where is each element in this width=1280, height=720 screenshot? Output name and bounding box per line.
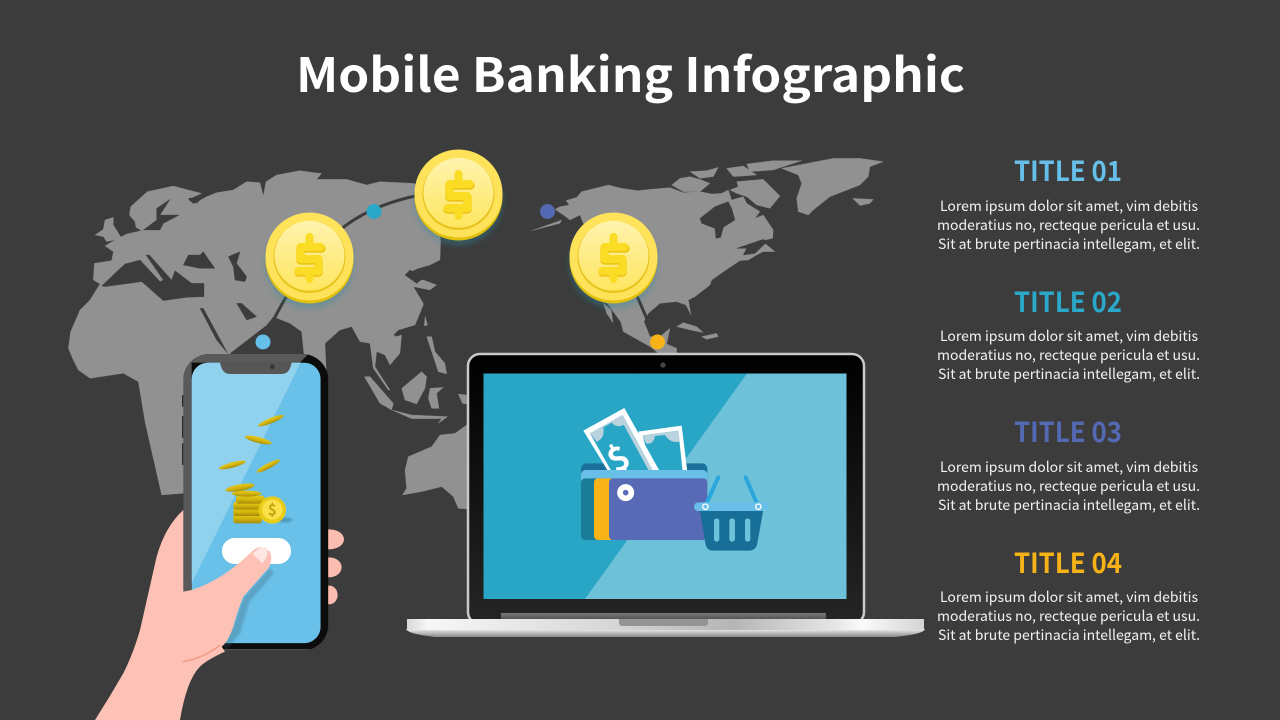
on-screen button — [222, 538, 291, 564]
coin stack — [225, 482, 292, 524]
laptop base — [407, 619, 924, 630]
body 03 — [937, 457, 1200, 515]
map: Great Britain — [95, 217, 122, 242]
screen light panel — [585, 374, 846, 599]
wallet flap — [581, 470, 707, 487]
icon: dollar coin left — [266, 212, 354, 308]
map: North America and Greenland — [532, 158, 883, 360]
laptop screen — [484, 374, 846, 599]
basket rim — [694, 502, 769, 511]
body 02: Sit at brute pertinacia intellegam, et elit. — [938, 364, 1200, 384]
thumb shadow — [222, 568, 274, 648]
basket rings — [703, 504, 761, 509]
hand and thumb — [95, 510, 271, 720]
body 04: Lorem ipsum dolor sit amet, vim debitis — [940, 587, 1198, 607]
heading 04: TITLE 04 — [1014, 542, 1122, 582]
fingers behind the phone — [315, 529, 344, 604]
thumbnail — [253, 547, 268, 563]
heading 03: TITLE 03 — [1014, 411, 1122, 451]
basket body — [700, 510, 763, 551]
phone camera — [270, 364, 275, 369]
phone notch — [220, 362, 292, 374]
body 03: moderatius no, recteque pericula et usu. — [937, 476, 1200, 496]
body 04: moderatius no, recteque pericula et usu. — [937, 606, 1200, 626]
basket slots — [714, 518, 750, 542]
text block 03 — [937, 411, 1200, 515]
map: inland seas — [102, 197, 423, 353]
laptop thumb notch — [619, 619, 708, 626]
route lines — [263, 195, 657, 342]
map: Eurasia and Africa — [68, 171, 441, 495]
phone held in hand — [95, 354, 344, 720]
banknote front: $ — [596, 430, 638, 483]
card teal — [581, 478, 614, 540]
body 01: Lorem ipsum dolor sit amet, vim debitis — [940, 196, 1198, 216]
route dot 02 — [366, 204, 382, 219]
icon: dollar coin right — [570, 212, 658, 308]
laptop camera — [660, 362, 666, 368]
falling coins — [218, 413, 285, 474]
laptop lid — [468, 354, 864, 624]
icon: dollar coin top — [414, 150, 502, 245]
laptop hinge — [501, 613, 826, 619]
heading 01: TITLE 01 — [1014, 150, 1122, 190]
text block 04 — [937, 542, 1200, 645]
world map — [68, 158, 883, 510]
coin stack: $ — [268, 498, 277, 520]
body 03: Sit at brute pertinacia intellegam, et elit. — [938, 495, 1200, 515]
laptop base lip — [406, 629, 925, 637]
body 01: moderatius no, recteque pericula et usu. — [937, 215, 1200, 235]
card yellow — [594, 478, 617, 540]
wallet snap — [620, 487, 631, 498]
wallet and basket illustration — [581, 408, 769, 551]
hand crease — [183, 645, 220, 662]
phone screen — [192, 363, 321, 643]
title: Mobile Banking Infographic — [296, 37, 965, 106]
route dot 01 — [256, 334, 270, 350]
body 02: moderatius no, recteque pericula et usu. — [937, 345, 1200, 365]
body 04 — [937, 587, 1200, 645]
body 04: Sit at brute pertinacia intellegam, et elit. — [938, 625, 1200, 645]
route dot 04 — [650, 334, 665, 350]
route dot 03 — [540, 204, 555, 219]
body 02 — [937, 326, 1200, 384]
map: South East Asia and Australia — [364, 317, 478, 510]
phone side buttons — [182, 395, 183, 465]
wallet back — [581, 463, 707, 490]
text block 01 — [937, 150, 1200, 254]
banknote rear — [638, 426, 687, 472]
body 01: Sit at brute pertinacia intellegam, et elit. — [938, 234, 1200, 254]
body 01 — [937, 196, 1200, 254]
body 03: Lorem ipsum dolor sit amet, vim debitis — [940, 457, 1198, 477]
banknote front — [583, 408, 660, 483]
phone body — [183, 354, 328, 651]
body 02: Lorem ipsum dolor sit amet, vim debitis — [940, 326, 1198, 346]
text block 02 — [937, 281, 1200, 384]
laptop — [406, 354, 925, 637]
card purple — [609, 478, 707, 540]
heading 02: TITLE 02 — [1014, 281, 1122, 321]
basket handles — [705, 477, 758, 507]
